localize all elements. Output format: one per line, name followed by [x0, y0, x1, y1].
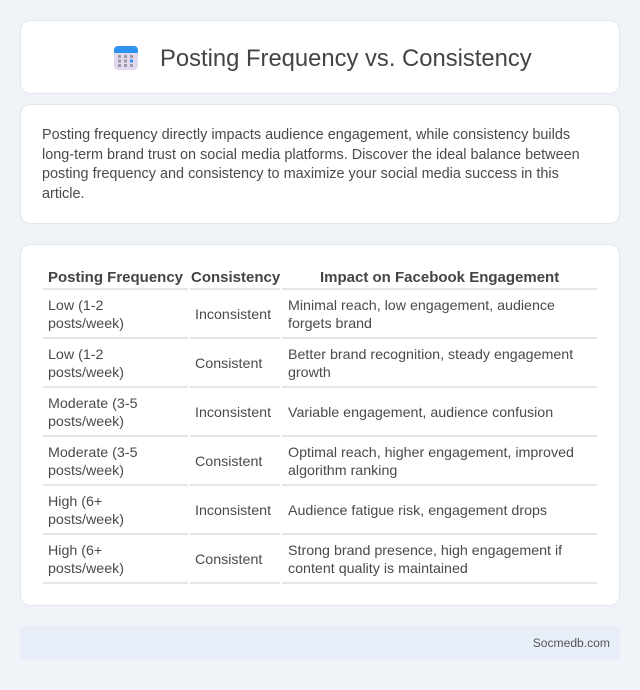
table: algorithm ranking: [288, 463, 397, 479]
intro text: long-term brand trust on social media platforms. Discover the ideal balance between: [42, 146, 580, 162]
table header: Posting Frequency: [48, 269, 183, 286]
table: Moderate (3-5: [48, 396, 138, 412]
table: Better brand recognition, steady engagement: [288, 347, 573, 363]
intro text: Posting frequency directly impacts audience engagement, while consistency builds: [42, 127, 570, 143]
title: Posting Frequency vs. Consistency: [160, 45, 532, 72]
table: posts/week): [48, 512, 124, 528]
table header: Consistency: [191, 269, 280, 286]
intro text: posting frequency and consistency to maximize your social media success in this: [42, 166, 559, 182]
table: High (6+: [48, 494, 102, 510]
table: Inconsistent: [195, 503, 271, 519]
intro text: [42, 127, 580, 202]
table: posts/week): [48, 414, 124, 430]
table: Inconsistent: [195, 307, 271, 323]
table: Minimal reach, low engagement, audience: [288, 298, 555, 314]
table: content quality is maintained: [288, 561, 468, 577]
table: growth: [288, 365, 331, 381]
table card: [20, 244, 620, 606]
title card: [20, 20, 620, 94]
table: posts/week): [48, 463, 124, 479]
table: Inconsistent: [195, 405, 271, 421]
footer bar: [20, 626, 620, 660]
table: Variable engagement, audience confusion: [288, 405, 553, 421]
table: forgets brand: [288, 316, 372, 332]
table: High (6+: [48, 543, 102, 559]
icon: calendar: [114, 46, 138, 70]
table: posts/week): [48, 316, 124, 332]
table: posts/week): [48, 561, 124, 577]
table: Audience fatigue risk, engagement drops: [288, 503, 547, 519]
intro text: article.: [42, 186, 85, 202]
table: Optimal reach, higher engagement, improved: [288, 445, 574, 461]
table: Strong brand presence, high engagement if: [288, 543, 562, 559]
table: posts/week): [48, 365, 124, 381]
table header: Impact on Facebook Engagement: [320, 269, 559, 286]
footer text: Socmedb.com: [533, 636, 610, 650]
table: Moderate (3-5: [48, 445, 138, 461]
table: Consistent: [195, 356, 262, 372]
table: Low (1-2: [48, 347, 103, 363]
table header: [48, 269, 560, 286]
table: Consistent: [195, 552, 262, 568]
table: Low (1-2: [48, 298, 103, 314]
table: Consistent: [195, 454, 262, 470]
intro card: [20, 104, 620, 224]
